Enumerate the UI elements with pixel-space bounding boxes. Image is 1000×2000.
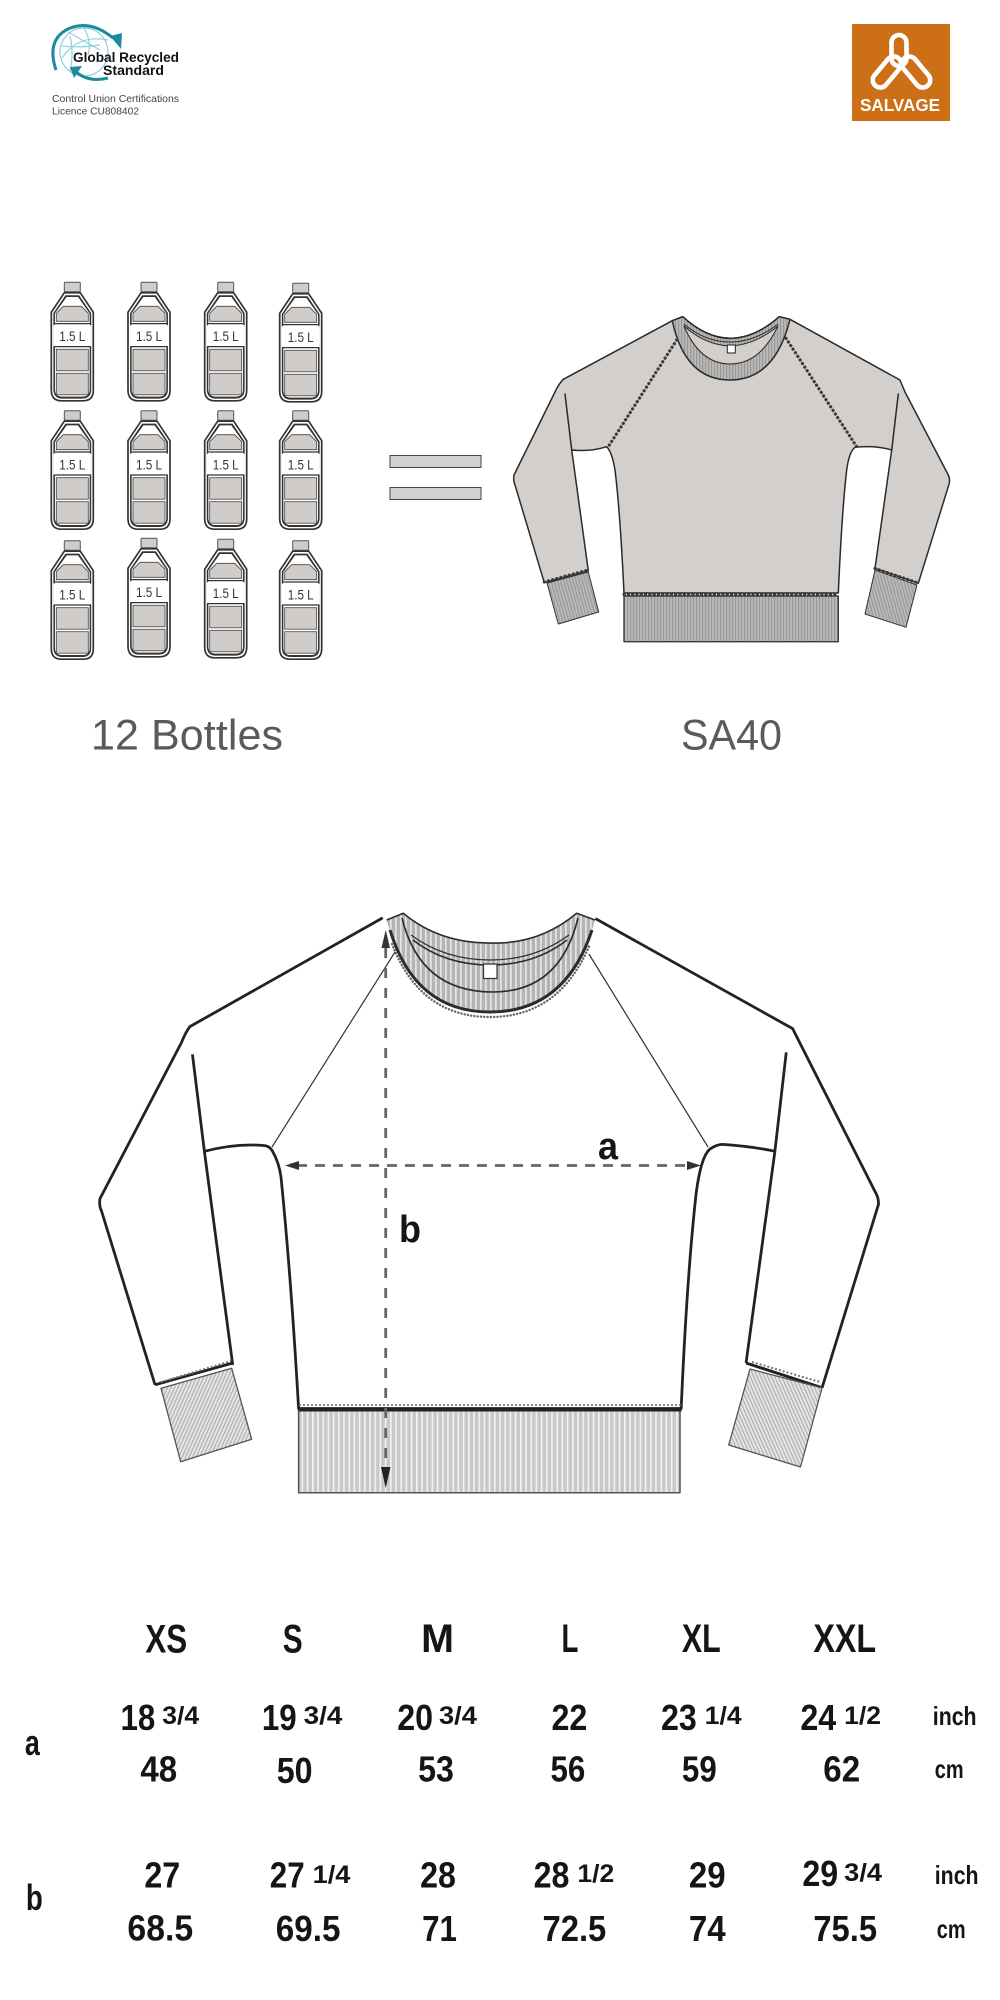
size headers: XL: [682, 1617, 721, 1661]
diagram: sweatshirt measurements: [100, 913, 878, 1493]
icon: bottle: 1.5 L: [59, 586, 85, 602]
collar lines: [387, 913, 595, 1012]
row b: centimetres: 75.5: [813, 1908, 877, 1949]
panel: 12 bottles grid: [51, 282, 322, 659]
row b: inches: 28: [534, 1855, 569, 1896]
icon: bottle: [51, 541, 93, 659]
row a: centimetres: 53: [418, 1749, 454, 1790]
icon: bottle: [51, 282, 93, 401]
row a: centimetres: 59: [682, 1749, 717, 1790]
neck label: [727, 345, 735, 353]
icon: bottle: [128, 411, 170, 529]
label: 12 Bottles: 12 Bottles: [91, 712, 283, 760]
collar stitching: [392, 944, 590, 1017]
row a: inches: 3/4: [304, 1702, 343, 1730]
row a: inches: 1/2: [844, 1702, 881, 1730]
row b: centimetres: 72.5: [543, 1908, 606, 1949]
row b: inches: inch: [935, 1862, 979, 1890]
row a: inches: 18: [120, 1697, 155, 1738]
icon: equals sign: [390, 456, 481, 500]
row a: centimetres: 50: [277, 1750, 313, 1791]
size headers: XXL: [813, 1617, 876, 1661]
label a: a: [598, 1126, 619, 1168]
icon: bottle: [128, 538, 170, 657]
icon: bottle: 1.5 L: [59, 328, 85, 344]
icon: bottle: [205, 539, 247, 658]
row a: centimetres: 62: [823, 1749, 860, 1790]
icon: bottle: 1.5 L: [288, 586, 314, 602]
icon: bottle: [280, 541, 322, 659]
raglan seams: [544, 338, 918, 594]
icon: bottle: 1.5 L: [213, 328, 239, 344]
hem rib: [299, 1410, 680, 1493]
certification text: Control Union Certifications: [52, 93, 179, 105]
row a: inches: 20: [397, 1697, 433, 1738]
row b: centimetres: [127, 1908, 966, 1949]
row b: centimetres: 69.5: [276, 1908, 340, 1949]
row a: inches: 19: [262, 1697, 297, 1738]
row b: centimetres: cm: [937, 1916, 966, 1944]
arrow b: vertical dashed: [381, 930, 390, 1488]
row a: inches: 1/4: [705, 1702, 742, 1730]
icon: bottle: [205, 411, 247, 529]
collar rib: [672, 317, 790, 380]
logo: Salvage: [852, 24, 950, 121]
size table: [25, 1617, 979, 1949]
right cuff: [865, 570, 917, 627]
row a: inches: [120, 1697, 977, 1738]
size headers: [145, 1617, 876, 1662]
row b: centimetres: 68.5: [127, 1908, 193, 1949]
row a: centimetres: 56: [551, 1749, 585, 1790]
row label b: b: [26, 1877, 43, 1918]
icon: bottle: 1.5 L: [288, 329, 314, 345]
row b: centimetres: 74: [689, 1908, 726, 1949]
Salvage wordmark: SALVAGE: [860, 95, 940, 115]
left cuff: [161, 1368, 252, 1462]
icon: bottle: 1.5 L: [213, 456, 239, 472]
size headers: S: [283, 1618, 303, 1662]
arrow a: horizontal dashed: [285, 1161, 701, 1170]
raglan seams: [272, 952, 708, 1147]
right cuff: [729, 1369, 822, 1467]
row a: inches: 22: [552, 1697, 587, 1738]
row b: inches: 27: [144, 1855, 180, 1896]
hem rib: [624, 596, 838, 642]
icon: globe with recycling arrows: [53, 26, 122, 79]
icon: bottle: 1.5 L: [136, 456, 162, 472]
icon: bottle: 1.5 L: [213, 585, 239, 601]
licence text: Licence CU808402: [52, 106, 139, 118]
row b: inches: 29: [802, 1853, 838, 1894]
size headers: XS: [145, 1618, 187, 1662]
icon: bottle: [51, 411, 93, 529]
icon: bottle: 1.5 L: [288, 456, 314, 472]
icon: bottle: [280, 411, 322, 529]
row a: inches: 24: [800, 1697, 836, 1738]
row a: centimetres: cm: [935, 1756, 964, 1784]
inner neck: [684, 326, 778, 364]
icon: bottle: 1.5 L: [59, 456, 85, 472]
row a: inches: 3/4: [439, 1702, 477, 1730]
row b: inches: 1/4: [313, 1861, 351, 1889]
row a: inches: 23: [661, 1697, 697, 1738]
logo text: Global Recycled Standard: Global Recycled: [73, 50, 179, 65]
row b: centimetres: 71: [422, 1908, 457, 1949]
row b: inches: 29: [689, 1855, 726, 1896]
icon: bottle: [280, 283, 322, 402]
collar rib: [387, 913, 595, 1012]
sweatshirt outline: [100, 918, 878, 1409]
row a: inches: inch: [933, 1703, 977, 1731]
row label a: a: [25, 1722, 41, 1763]
row b: inches: 3/4: [844, 1859, 882, 1887]
icon: bottle: 1.5 L: [136, 328, 162, 344]
label: SA40: SA40: [681, 712, 782, 760]
row a: inches: 3/4: [162, 1702, 199, 1730]
logo text: Standard: Standard: [103, 63, 164, 78]
neck label: [484, 964, 497, 978]
icon: bottle: [128, 282, 170, 401]
row b: inches: 1/2: [577, 1860, 614, 1888]
row b: inches: 28: [420, 1855, 456, 1896]
size headers: M: [421, 1617, 454, 1661]
label b: b: [399, 1209, 421, 1251]
row b: inches: [144, 1853, 979, 1896]
row b: inches: 27: [270, 1855, 305, 1896]
left cuff: [547, 572, 599, 624]
icon: bottle: [205, 282, 247, 401]
logo: Global Recycled Standard: [52, 26, 179, 117]
size headers: L: [561, 1617, 578, 1661]
row a: centimetres: [140, 1749, 964, 1791]
row a: centimetres: 48: [140, 1749, 177, 1790]
sweatshirt body and sleeves: [514, 317, 950, 593]
illustration: grey sweatshirt SA40: [514, 317, 950, 642]
icon: bottle: 1.5 L: [136, 584, 162, 600]
